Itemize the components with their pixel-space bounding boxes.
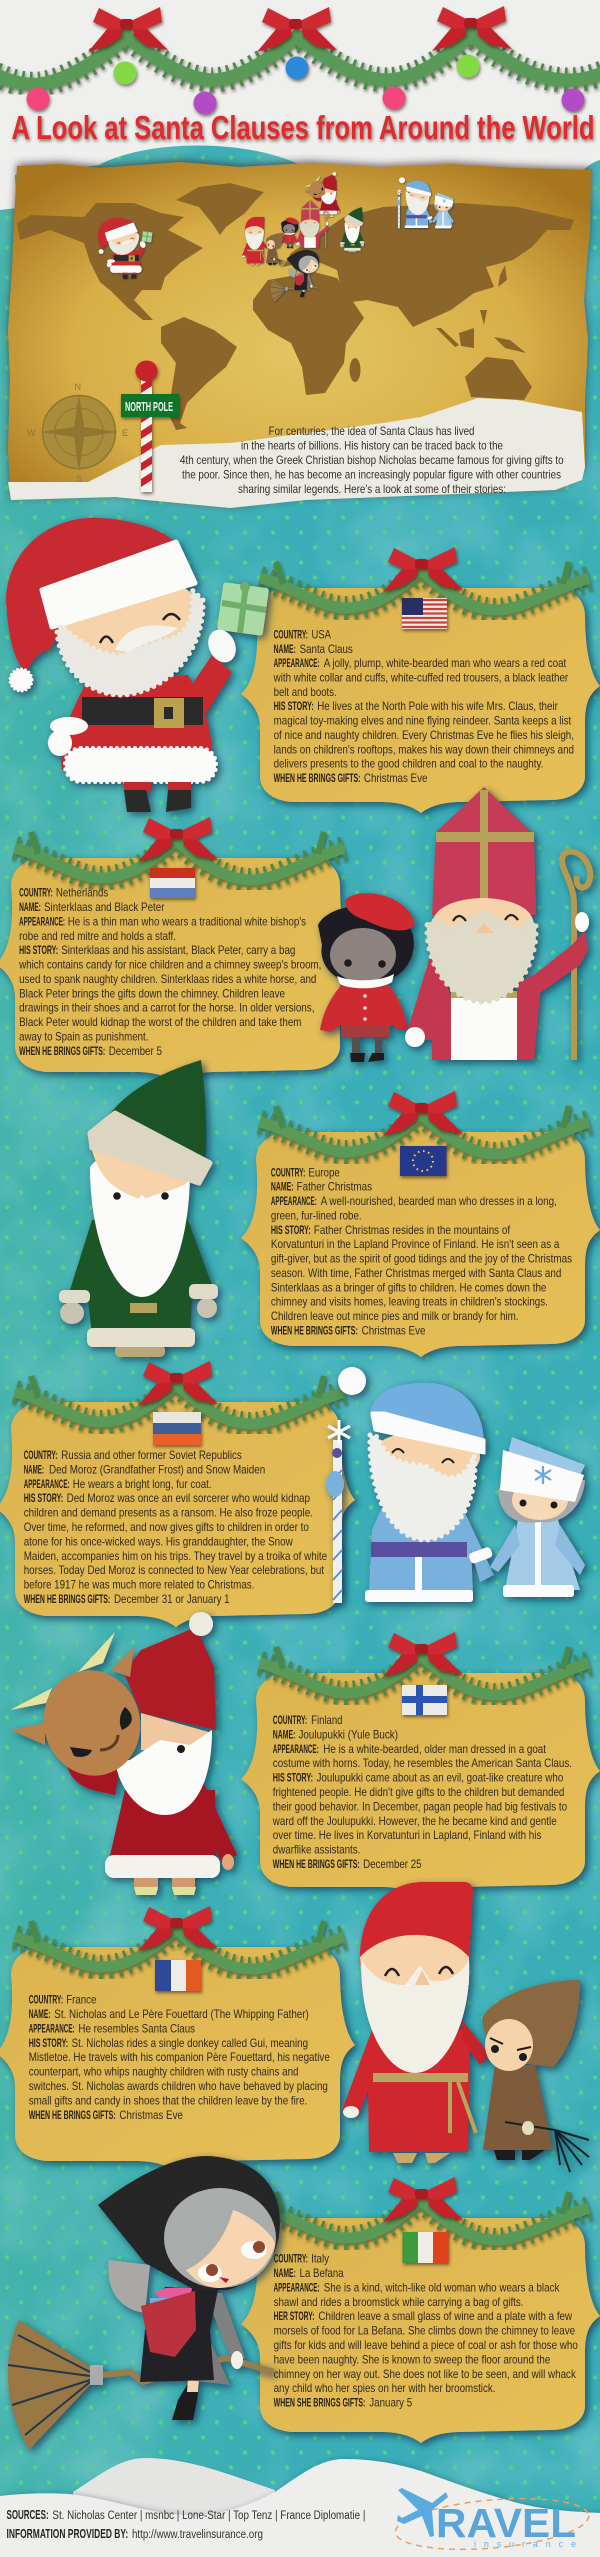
- compass: S: [76, 474, 82, 484]
- text: France details: WHEN HE BRINGS GIFTS:: [29, 2108, 116, 2122]
- text: Europe details: Father Christmas: [297, 1180, 372, 1194]
- text: Netherlands details: Sinterklaas and his assistant, Black Peter, carry a bag: [61, 943, 295, 957]
- text: Italy details: WHEN SHE BRINGS GIFTS:: [274, 2396, 365, 2410]
- text: Europe details: [271, 1165, 572, 1337]
- text: Russia details: before 1917 he was much more related to Christmas.: [24, 1578, 254, 1592]
- text: Europe details: Christmas Eve: [362, 1323, 426, 1337]
- text: USA details: WHEN HE BRINGS GIFTS:: [274, 771, 360, 785]
- staff: [326, 1420, 350, 1603]
- text: Finland details: dwarflike assistants.: [273, 1843, 360, 1857]
- top snow panel: [0, 0, 600, 210]
- text: Russia details: horses. Today Ded Moroz is connected to New Year celebrations, but: [24, 1563, 325, 1577]
- mini character: Sinterklaas: [296, 200, 329, 248]
- hat: [360, 1882, 473, 1965]
- footer: sources: St. Nicholas Center | msnbc | Lone-Star | Top Tenz | France Diplomatie |: [52, 2510, 365, 2522]
- character: Snow Maiden: [490, 1437, 585, 1597]
- garland: [15, 832, 344, 880]
- text: France details: COUNTRY:: [29, 1993, 63, 2007]
- bow: [383, 2177, 463, 2222]
- text: Italy details: La Befana: [300, 2266, 344, 2280]
- text: Netherlands details: robe and red mitre and holds a staff.: [19, 929, 176, 943]
- orbit: [393, 2492, 591, 2556]
- text: Russia details: Maiden, accompanies him on his trips. They travel by a troika of white: [24, 1549, 327, 1563]
- character: St. Nicholas: [342, 1882, 490, 2163]
- parchment: [8, 162, 591, 508]
- text: Netherlands details: HIS STORY:: [19, 943, 58, 957]
- text: Italy details: APPEARANCE:: [274, 2280, 320, 2294]
- text: Finland details: NAME:: [273, 1727, 295, 1741]
- character: Ded Moroz: [326, 1367, 494, 1603]
- character: Black Peter: [318, 893, 415, 1062]
- card shape: [241, 1661, 600, 1898]
- text: Netherlands details: NAME:: [19, 900, 41, 914]
- text: France details: Mistletoe. He travels with his companion Père Fouettard, his negative: [29, 2050, 330, 2064]
- card shape: [0, 846, 355, 1083]
- text: Netherlands details: Black Peter brings the gifts down the chimney. Children leave: [19, 986, 285, 1000]
- text: France details: Christmas Eve: [119, 2108, 183, 2122]
- hat: [105, 1060, 206, 1165]
- text: Europe details: Europe: [308, 1165, 340, 1179]
- hat: [6, 518, 178, 672]
- broom: [505, 2122, 589, 2172]
- mini character: Pere Fouettard: [266, 233, 285, 267]
- flag: France: [155, 1960, 201, 1991]
- text: USA details: belt and boots.: [274, 685, 337, 699]
- compass: N: [74, 382, 81, 392]
- text: Russia details: NAME:: [24, 1462, 44, 1476]
- logo: Travel Insurance: [393, 2488, 591, 2556]
- beard: [57, 590, 203, 695]
- text: Netherlands details: COUNTRY:: [19, 886, 53, 900]
- text: Netherlands details: December 5: [109, 1044, 162, 1058]
- text: France details: counterpart, who whips naughty children with rusty chains and: [29, 2065, 298, 2079]
- compass: W: [27, 428, 36, 438]
- text: Finland details: APPEARANCE:: [273, 1742, 319, 1756]
- text: Europe details: APPEARANCE:: [271, 1194, 317, 1208]
- text: Italy details: COUNTRY:: [274, 2252, 308, 2266]
- intro text: [180, 424, 564, 496]
- text: Netherlands details: Black Peter would kidnap the worst of the children and take them: [19, 1015, 302, 1029]
- text: Russia details: Ded Moroz (Grandfather Frost) and Snow Maiden: [49, 1462, 265, 1476]
- text: USA details: APPEARANCE:: [274, 656, 320, 670]
- panel: Russia: [0, 1361, 355, 1627]
- flag: USA: [402, 598, 447, 629]
- north pole post: [121, 360, 179, 492]
- text: Europe details: HIS STORY:: [271, 1223, 311, 1237]
- text: Russia details: [24, 1448, 327, 1606]
- text: Netherlands details: He is a thin man who wears a traditional white bishop's: [68, 914, 306, 928]
- character: La Befana: [8, 2156, 280, 2450]
- text: Netherlands details: [18, 886, 321, 1058]
- text: Europe details: green, fur-lined robe.: [271, 1208, 362, 1222]
- text: Netherlands details: APPEARANCE:: [19, 914, 65, 928]
- character: Sinterklaas: [405, 787, 590, 1060]
- bag: [141, 2288, 196, 2357]
- card shape: [0, 1935, 355, 2172]
- tagline: insurance: [474, 2539, 576, 2549]
- footer: sources: SOURCES:: [6, 2507, 49, 2522]
- character: Joulupukki: [10, 1612, 237, 1895]
- garland: [15, 1376, 344, 1424]
- text: Finland details: COUNTRY:: [273, 1713, 307, 1727]
- text: France details: St. Nicholas and Le Père Fouettard (The Whipping Father): [54, 2007, 309, 2021]
- panel: Europe: [241, 1091, 600, 1357]
- text: Russia details: HIS STORY:: [24, 1491, 63, 1505]
- text: Finland details: HIS STORY:: [273, 1771, 313, 1785]
- panel: France: [0, 1906, 355, 2172]
- text: Finland details: Joulupukki (Yule Buck): [298, 1727, 398, 1741]
- garland: [260, 2192, 589, 2240]
- text: Netherlands details: Sinterklaas and Black Peter: [44, 900, 164, 914]
- text: France details: APPEARANCE:: [29, 2021, 75, 2035]
- text: Finland details: over time. He lives in Korvatunturi in Lapland, Finland with his: [273, 1828, 541, 1842]
- text: Netherlands details: drawings in their shoes and a carrot for the horse. In older versions,: [19, 1001, 314, 1015]
- mini character: Father Christmas: [340, 207, 364, 252]
- goat mask: [10, 1632, 152, 1787]
- card shape: [0, 1390, 355, 1627]
- character: Santa Claus: [6, 518, 269, 812]
- mini character: La Befana: [271, 250, 319, 302]
- top bow 3: [432, 6, 512, 51]
- panel: USA: [241, 547, 600, 813]
- text: France details: HIS STORY:: [29, 2036, 68, 2050]
- text: France details: [29, 1993, 330, 2122]
- hat: [124, 1627, 216, 1730]
- text: France details: France: [66, 1993, 97, 2007]
- intro text: For centuries, the idea of Santa Claus has lived: [269, 424, 474, 438]
- ornaments: [26, 54, 584, 114]
- text: France details: switches. St. Nicholas awards children who have behaved by placing: [29, 2079, 328, 2093]
- text: France details: St. Nicholas rides a single donkey called Gui, meaning: [72, 2036, 308, 2050]
- text: Italy details: Italy: [311, 2252, 329, 2266]
- text: USA details: Santa Claus: [300, 642, 353, 656]
- mini character: Santa: [98, 218, 153, 279]
- panel: Italy: [241, 2177, 600, 2443]
- text: Italy details: HER STORY:: [274, 2309, 314, 2323]
- text: Netherlands details: WHEN HE BRINGS GIFTS:: [19, 1044, 105, 1058]
- text: Europe details: Children leave out mince pies and milk or brandy for him.: [271, 1309, 518, 1323]
- back hill: [73, 2458, 275, 2520]
- text: USA details: COUNTRY:: [274, 627, 308, 641]
- bow: [138, 817, 218, 862]
- footer: sources: INFORMATION PROVIDED BY:: [6, 2526, 128, 2541]
- text: Europe details: COUNTRY:: [271, 1165, 305, 1179]
- hat: [370, 1383, 484, 1445]
- garland: [260, 1647, 589, 1695]
- card shape: [241, 1120, 600, 1357]
- bow: [383, 1091, 463, 1136]
- text: Netherlands details: used to spank naughty children. Sinterklaas rides a white horse, and: [19, 972, 316, 986]
- compass: [27, 382, 128, 484]
- card shape: [241, 2206, 600, 2443]
- flag: Netherlands: [150, 868, 195, 898]
- text: Russia details: Over time, he reformed, and now gives gifts to children in order to: [24, 1520, 309, 1534]
- text: USA details: [273, 627, 574, 785]
- text: Russia details: Russia and other former Soviet Republics: [61, 1448, 242, 1462]
- intro text: sharing similar legends. Here's a look at some of their stories:: [238, 482, 506, 496]
- text: Italy details: [274, 2252, 578, 2410]
- garland: [15, 1921, 344, 1969]
- text: Europe details: chimney and visits homes, leaving treats in children's stockings.: [271, 1295, 548, 1309]
- text: Russia details: December 31 or January 1: [114, 1592, 230, 1606]
- mini character: St. Nicholas: [242, 217, 267, 265]
- text: Italy details: shawl and rides a broomstick while carrying a bag of gifts.: [274, 2295, 524, 2309]
- top bow 2: [257, 7, 337, 52]
- mini character: Ded Moroz: [396, 177, 433, 228]
- intro text: in the hearts of billions. His history can be traced back to the: [241, 438, 503, 452]
- flag: Finland: [402, 1685, 447, 1715]
- footer: sources: http://www.travelinsurance.org: [132, 2529, 263, 2541]
- plane: [397, 2488, 448, 2537]
- text: Italy details: NAME:: [274, 2266, 296, 2280]
- text: France details: NAME:: [29, 2007, 50, 2021]
- gift: [217, 582, 269, 636]
- bow: [138, 1361, 218, 1406]
- text: Russia details: APPEARANCE:: [24, 1477, 70, 1491]
- hood: [98, 2156, 280, 2290]
- text: Russia details: atone for his once-wicked ways. His granddaughter, the Snow: [24, 1534, 293, 1548]
- panel: Netherlands: [0, 817, 355, 1083]
- broom: [8, 2320, 274, 2450]
- text: Finland details: [272, 1713, 572, 1871]
- text: Finland details: Finland: [311, 1713, 342, 1727]
- text: USA details: HIS STORY:: [274, 699, 314, 713]
- text: Europe details: WHEN HE BRINGS GIFTS:: [271, 1323, 358, 1337]
- character: Father Christmas: [59, 1060, 218, 1357]
- panel: world map: [8, 162, 591, 508]
- text: Russia details: He wears a bright long, fur coat.: [73, 1477, 212, 1491]
- north pole post: NORTH POLE: [125, 399, 173, 414]
- bow: [383, 1632, 463, 1677]
- text: Netherlands details: away to Spain as punishment.: [19, 1029, 148, 1043]
- mini character: Joulupukki: [304, 172, 340, 217]
- garland: [260, 1106, 589, 1154]
- text: Europe details: Sinterklaas as a bringer of gifts to children. He comes down the: [271, 1280, 547, 1294]
- flag: Russia: [153, 1412, 201, 1445]
- text: Finland details: December 25: [363, 1857, 422, 1871]
- mitre: [432, 787, 536, 915]
- mini character: Snow Maiden: [432, 192, 454, 228]
- text: Finland details: WHEN HE BRINGS GIFTS:: [273, 1857, 360, 1871]
- text: Europe details: Father Christmas resides in the mountains of: [314, 1223, 511, 1237]
- front snow: [0, 2459, 600, 2557]
- top garland with bows and ornaments: [0, 6, 600, 114]
- text: Europe details: NAME:: [271, 1180, 294, 1194]
- character: Pere Fouettard: [482, 1980, 589, 2172]
- text: France details: small gifts and candy in shoes that the children leave by the fire.: [29, 2093, 307, 2107]
- snow strip: [8, 398, 585, 508]
- text: Russia details: children and demand presents as a ransom. He also froze people.: [24, 1506, 313, 1520]
- bow: [383, 547, 463, 592]
- mini character: Black Peter: [281, 218, 298, 248]
- text: USA details: Christmas Eve: [364, 771, 428, 785]
- text: Russia details: Ded Moroz was once an evil sorcerer who would kidnap: [67, 1491, 310, 1505]
- text: Russia details: COUNTRY:: [24, 1448, 57, 1462]
- card shape: [241, 576, 600, 813]
- bow: [138, 1906, 218, 1951]
- text: Finland details: He is a white-bearded, older man dressed in a goat: [323, 1742, 547, 1756]
- text: Italy details: January 5: [369, 2396, 412, 2410]
- panel: Finland: [241, 1632, 600, 1898]
- text: USA details: USA: [312, 627, 331, 641]
- continents: [17, 183, 574, 430]
- text: Italy details: any child who her spies on her with her broomstick.: [274, 2381, 496, 2395]
- compass: E: [122, 428, 128, 438]
- text: Netherlands details: Netherlands: [56, 886, 108, 900]
- bottom snow hills: [0, 2458, 600, 2557]
- garland: [260, 562, 589, 610]
- top bow 1: [88, 7, 168, 52]
- footer: sources: [6, 2507, 365, 2541]
- text: Netherlands details: which contains candy for nice children and a chimney sweep's broom,: [18, 958, 321, 972]
- flag: Italy: [402, 2232, 448, 2263]
- text: USA details: NAME:: [274, 642, 296, 656]
- text: USA details: delivers presents to the good children and coal to the naughty.: [274, 757, 543, 771]
- flag: Europe: [400, 1146, 446, 1176]
- garland strand: [0, 34, 600, 84]
- text: Russia details: WHEN HE BRINGS GIFTS:: [24, 1592, 110, 1606]
- text: France details: He resembles Santa Claus: [78, 2021, 195, 2035]
- wordmark: RAVEL: [436, 2500, 576, 2546]
